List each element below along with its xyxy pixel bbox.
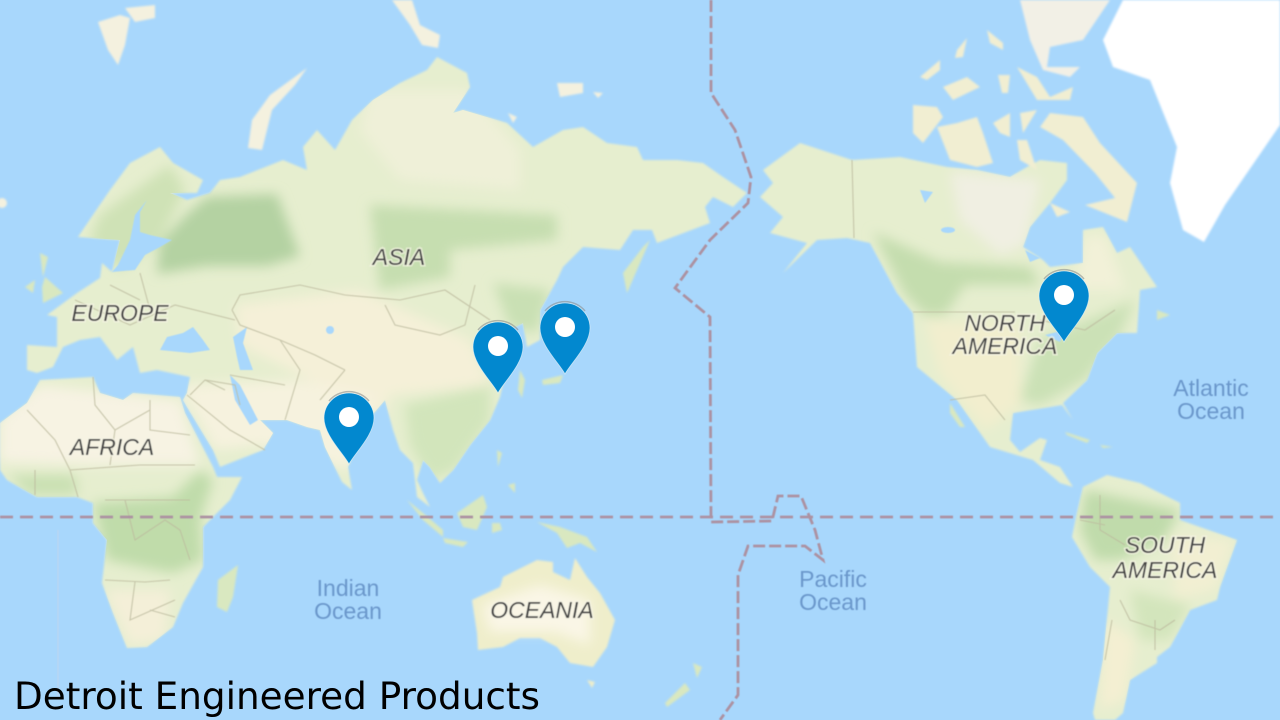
caption: Detroit Engineered Products: Detroit Engineered Products bbox=[14, 675, 540, 718]
label: North America: AMERICA bbox=[951, 333, 1057, 359]
Greenland bbox=[1103, 0, 1280, 242]
label: Atlantic Ocean: Ocean bbox=[1177, 398, 1245, 424]
label: South America: AMERICA bbox=[1111, 557, 1217, 583]
label: Atlantic Ocean: Atlantic bbox=[1173, 375, 1249, 401]
label: Europe: EUROPE bbox=[71, 300, 169, 326]
label: North America: NORTH bbox=[964, 310, 1046, 336]
label: Asia: ASIA bbox=[371, 244, 425, 270]
Africa bbox=[0, 377, 242, 648]
label: Indian Ocean: Indian bbox=[317, 575, 379, 601]
map pin: India bbox=[324, 392, 374, 464]
map pin: Japan bbox=[540, 302, 590, 374]
label: Oceania: OCEANIA bbox=[490, 597, 594, 623]
map pin: Detroit bbox=[1039, 270, 1089, 342]
Australia bbox=[472, 558, 615, 667]
label: Pacific Ocean: Pacific bbox=[799, 566, 867, 592]
northern Atlantic and Russian Arctic islands bbox=[0, 0, 603, 208]
inland seas and lakes bbox=[112, 190, 1065, 425]
Arctic archipelago bbox=[913, 0, 1137, 222]
label: Africa: AFRICA bbox=[68, 434, 154, 460]
label: South America: SOUTH bbox=[1125, 532, 1206, 558]
label: Pacific Ocean: Ocean bbox=[799, 589, 867, 615]
map pin: China bbox=[473, 321, 523, 393]
Australia interior bbox=[482, 585, 590, 645]
continent labels bbox=[68, 244, 1217, 623]
Eurasia bbox=[27, 57, 747, 507]
country borders bbox=[27, 160, 1175, 700]
ocean labels bbox=[314, 375, 1249, 624]
label: Indian Ocean: Ocean bbox=[314, 598, 382, 624]
South America bbox=[1072, 475, 1237, 720]
North America bbox=[760, 143, 1157, 487]
islands: Britain, Japan, Southeast Asia, Madagascar, New Zealand bbox=[25, 240, 1170, 707]
